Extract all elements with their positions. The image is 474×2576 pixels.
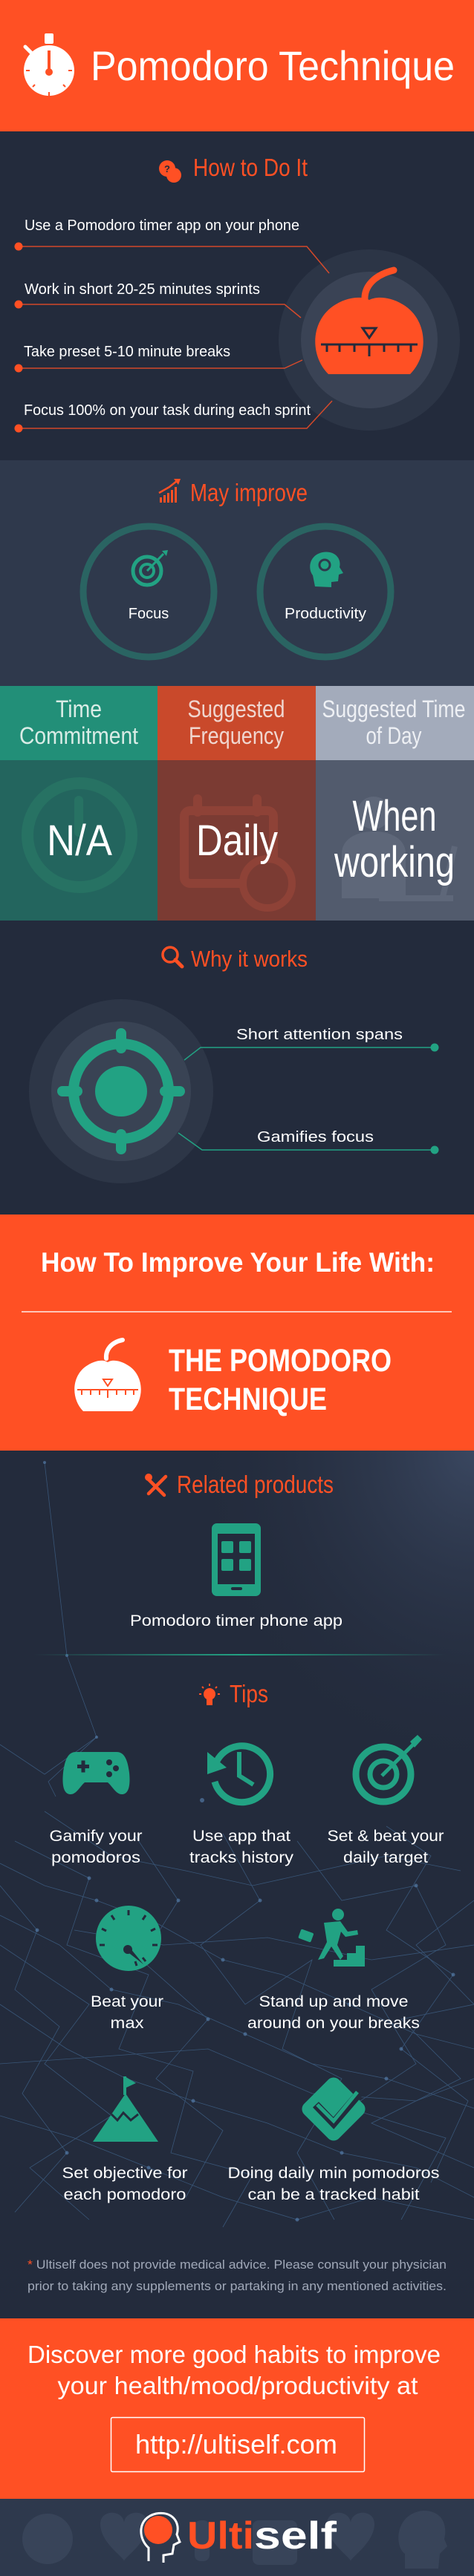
tip: beat your max	[91, 1906, 163, 2032]
url button: http://ultiself.com	[135, 2429, 337, 2459]
circle: productivity: Productivity	[285, 606, 366, 622]
tip: set objective: Set objective for	[62, 2165, 187, 2182]
panel: how to do it	[0, 131, 474, 460]
circle: productivity	[260, 526, 391, 657]
callouts: reasons	[178, 1027, 438, 1154]
column: suggested frequency: Frequency	[189, 722, 284, 749]
heading: how to do it: ?	[164, 163, 170, 174]
network background	[0, 1462, 474, 2227]
url button	[111, 2417, 364, 2472]
heading: may improve: May improve	[190, 479, 308, 506]
tip: tracked habit: Doing daily min pomodoros	[227, 2165, 440, 2182]
heading: related products: Related products	[177, 1471, 334, 1498]
circle: focus	[83, 526, 214, 657]
tip: stand up: Stand up and move	[259, 1993, 409, 2010]
column: time commitment	[0, 686, 158, 921]
panel: stats table	[0, 686, 474, 921]
tip: set objective	[62, 2076, 187, 2203]
tip: set objective: each pomodoro	[64, 2186, 186, 2203]
title: Pomodoro Technique	[91, 42, 455, 89]
circle: focus: Focus	[129, 606, 169, 622]
step list: Work in short 20-25 minutes sprints	[25, 281, 260, 298]
tip: tracked habit	[227, 2074, 440, 2203]
column: suggested frequency	[158, 686, 316, 921]
call to action: your health/mood/productivity at	[58, 2372, 418, 2399]
footer	[0, 2499, 474, 2576]
label: phone app: Pomodoro timer phone app	[130, 1612, 342, 1629]
heading: may improve	[159, 479, 308, 506]
tip: daily target: Set & beat your	[327, 1828, 444, 1845]
faint footer icons	[22, 2511, 447, 2569]
icon: stopwatch	[24, 33, 74, 96]
column: time commitment: Time	[56, 696, 102, 722]
heading: why it works: Why it works	[191, 946, 308, 972]
panel: why it works	[0, 921, 474, 1215]
heading: how to do it	[159, 154, 308, 183]
tip: daily target: daily target	[343, 1849, 428, 1866]
logo: ultiself: self	[254, 2514, 337, 2557]
icon: crosshair	[29, 999, 213, 1183]
call to action	[0, 2318, 474, 2499]
disclaimer: prior to taking any supplements or partaking in any mentioned activities.	[27, 2279, 447, 2293]
column: suggested time of day: of Day	[366, 722, 422, 749]
column: time commitment: Commitment	[19, 722, 138, 749]
icon: white tomato	[74, 1340, 141, 1411]
tip: track history	[189, 1746, 294, 1866]
tip: gamify	[49, 1752, 143, 1866]
tip: beat your max: Beat your	[91, 1993, 163, 2010]
banner: how to improve	[0, 1215, 474, 1451]
tip: track history: tracks history	[189, 1849, 294, 1866]
icon: phone app	[212, 1523, 261, 1596]
banner: how to improve: TECHNIQUE	[169, 1382, 327, 1417]
tip: stand up	[247, 1909, 420, 2032]
tip: tracked habit: can be a tracked habit	[248, 2186, 420, 2203]
tip: track history: Use app that	[192, 1828, 290, 1845]
heading: tips: Tips	[230, 1680, 268, 1707]
step list	[15, 218, 332, 432]
icon: tomato timer in circles	[279, 249, 460, 431]
banner: how to improve: THE POMODORO	[169, 1343, 392, 1379]
tip: daily target	[327, 1735, 444, 1866]
column: suggested frequency: Suggested	[187, 696, 285, 722]
heading: how to do it: How to Do It	[193, 154, 308, 181]
logo: ultiself	[141, 2513, 337, 2563]
tip: stand up: around on your breaks	[247, 2015, 420, 2032]
callouts: reasons: Short attention spans	[236, 1027, 403, 1043]
column: suggested time of day	[316, 686, 474, 921]
tip: beat your max: max	[110, 2015, 144, 2032]
logo: ultiself: Ulti	[187, 2514, 254, 2557]
tip: gamify: Gamify your	[49, 1828, 143, 1845]
disclaimer	[27, 2258, 447, 2293]
column: time commitment: N/A	[47, 817, 112, 865]
heading: tips	[199, 1680, 268, 1707]
panel: may improve	[0, 460, 474, 686]
header band	[0, 0, 474, 131]
step list: Focus 100% on your task during each sprint	[24, 402, 311, 419]
callouts: reasons: Gamifies focus	[257, 1129, 374, 1145]
column: suggested time of day: When	[352, 792, 437, 840]
step list: Use a Pomodoro timer app on your phone	[25, 218, 299, 234]
step list: Take preset 5-10 minute breaks	[24, 344, 230, 360]
call to action: Discover more good habits to improve	[27, 2341, 441, 2368]
disclaimer: * Ultiself does not provide medical advice. Please consult your physician	[27, 2258, 447, 2272]
banner: how to improve: How To Improve Your Life With:	[41, 1247, 435, 1278]
panel: related products and tips	[0, 1451, 474, 2318]
tip: gamify: pomodoros	[51, 1849, 140, 1866]
column: suggested frequency: Daily	[196, 817, 278, 865]
